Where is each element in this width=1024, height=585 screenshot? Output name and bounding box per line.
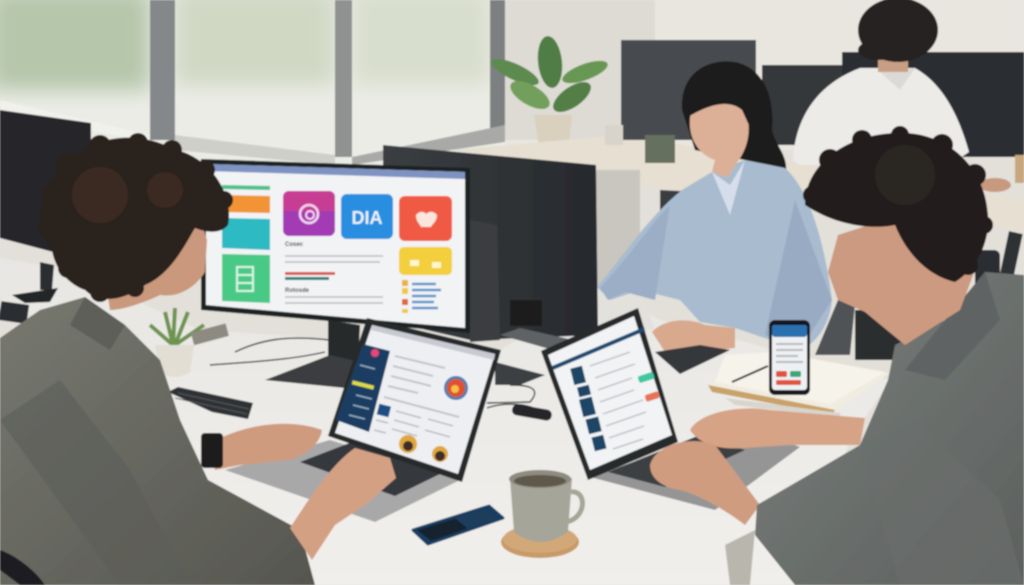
phone on desk (413, 506, 503, 544)
arm on laptop (690, 408, 865, 448)
main monitor (201, 159, 470, 333)
left person (0, 133, 396, 585)
rear monitor, right of main (383, 145, 598, 385)
far right desk items (1015, 155, 1024, 183)
shirt (755, 272, 1024, 585)
card: red (399, 196, 452, 241)
neck and face (105, 200, 207, 310)
chair bottom left (0, 550, 45, 585)
main monitor: Rotosde (285, 288, 310, 294)
hand (652, 320, 735, 352)
main desk (0, 258, 890, 585)
near forearm and hand (290, 448, 396, 560)
sidebar cards (222, 185, 270, 190)
small plant on desk (150, 308, 229, 377)
window (0, 0, 505, 165)
blouse (597, 160, 832, 350)
paper stack and notebook (708, 352, 890, 418)
list (402, 280, 408, 286)
mug (501, 470, 582, 558)
face (690, 100, 749, 178)
cables (210, 338, 545, 418)
left monitor (0, 110, 91, 324)
hair (40, 138, 229, 299)
right person (650, 126, 1024, 585)
card: purple (283, 191, 335, 236)
woman (597, 61, 832, 352)
back desk (450, 135, 1024, 235)
woman laptop (655, 345, 730, 374)
card: yellow (399, 247, 452, 275)
keyboard behind (500, 328, 595, 352)
chair behind woman (815, 300, 855, 355)
text labels: Cosec (285, 242, 304, 248)
hair back (682, 61, 786, 172)
monitor stand and base (265, 320, 360, 388)
right laptop (541, 308, 800, 510)
watch (201, 433, 223, 468)
hair (805, 133, 988, 282)
far hand (205, 424, 322, 470)
face and neck (828, 215, 975, 345)
back man (793, 0, 969, 165)
main monitor: DIA (352, 208, 382, 228)
back monitors (605, 40, 1024, 163)
keyboard left (168, 387, 253, 419)
left laptop (225, 318, 501, 522)
shirt (0, 297, 315, 585)
plant in back (488, 35, 610, 152)
card: blue DIA (341, 194, 393, 239)
phone upright (769, 320, 810, 395)
